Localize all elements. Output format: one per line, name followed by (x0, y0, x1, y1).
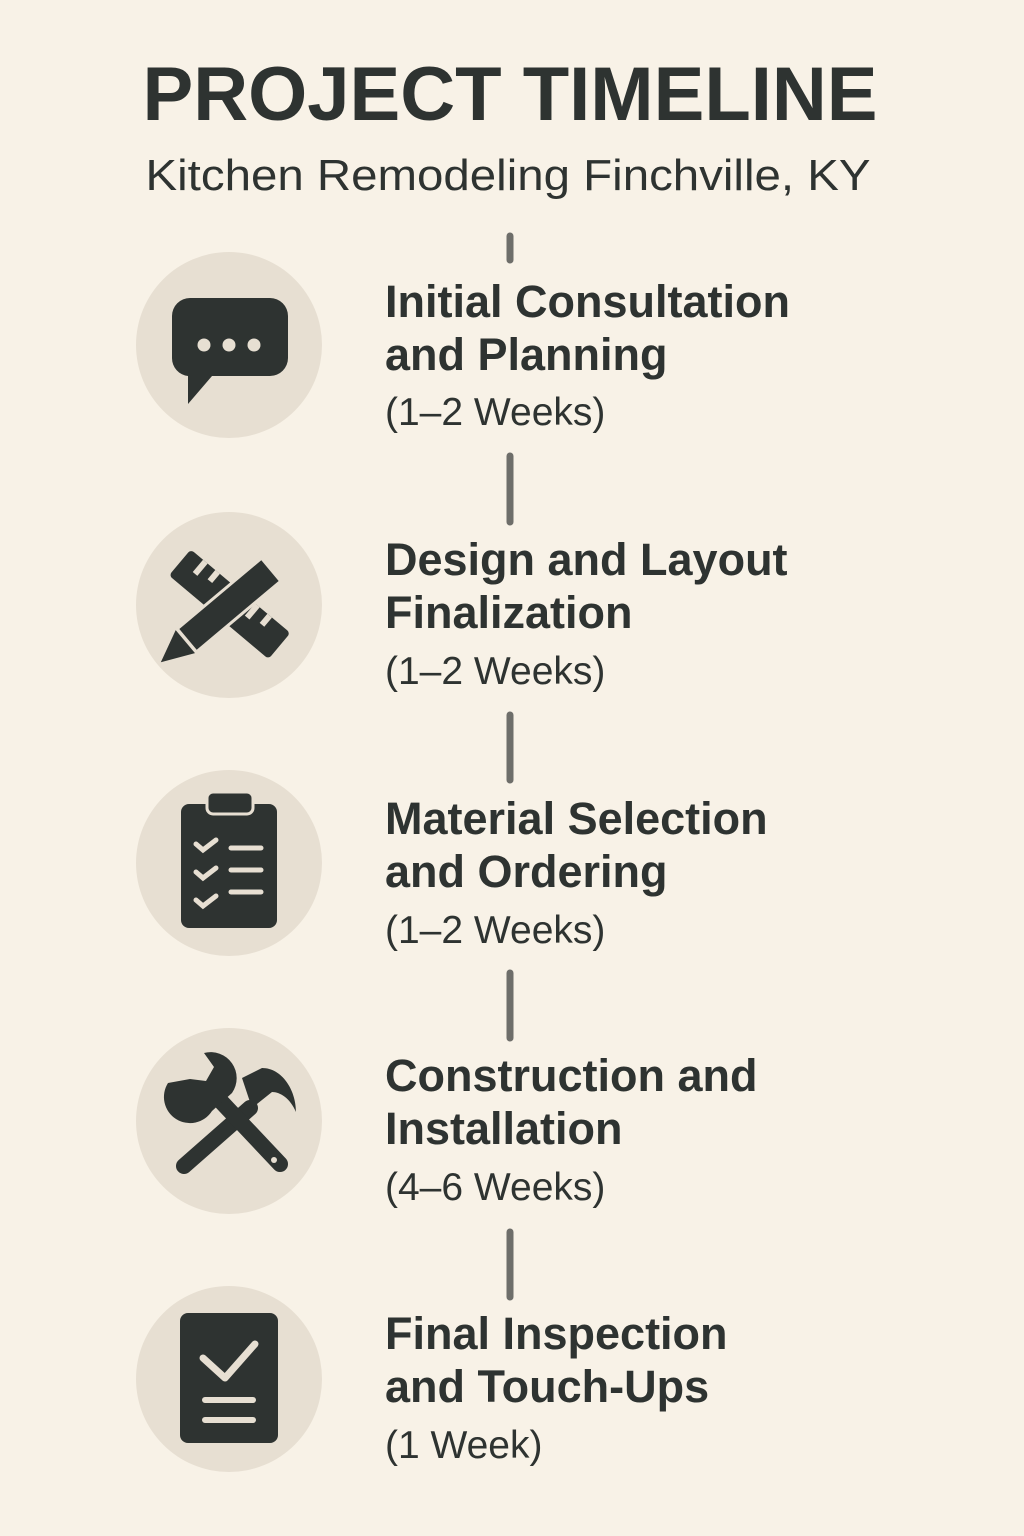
text: step 1: Initial Consultation (385, 276, 790, 327)
text: step 5: Final Inspection (385, 1308, 728, 1359)
icon: checked document (136, 1286, 322, 1472)
text: step 3: (1–2 Weeks) (385, 909, 605, 952)
text: step 1: (1–2 Weeks) (385, 391, 605, 434)
text: step 3 (385, 793, 768, 952)
step 4: construction (136, 1028, 757, 1214)
step 5: inspection (136, 1286, 728, 1472)
text: step 2: Finalization (385, 587, 632, 638)
text: step 2: Design and Layout (385, 534, 788, 585)
text: step 2 (385, 534, 788, 693)
step 2: design (136, 512, 788, 698)
text: step 4: Installation (385, 1103, 623, 1154)
icon: chat bubble (136, 252, 322, 438)
icon: wrench and hammer (136, 1028, 322, 1214)
text: step 3: Material Selection (385, 793, 768, 844)
text: step 4 (385, 1050, 757, 1209)
text: step 5 (385, 1308, 728, 1467)
step 3: materials (136, 770, 768, 956)
text: step 4: Construction and (385, 1050, 757, 1101)
icon: pencil and ruler (136, 512, 322, 698)
text: step 2: (1–2 Weeks) (385, 650, 605, 693)
title: PROJECT TIMELINE (142, 52, 878, 137)
text: step 5: (1 Week) (385, 1424, 542, 1467)
subtitle: Kitchen Remodeling Finchville, KY (146, 151, 870, 200)
text: step 3: and Ordering (385, 846, 668, 897)
text: step 4: (4–6 Weeks) (385, 1166, 605, 1209)
text: step 5: and Touch-Ups (385, 1361, 709, 1412)
text: step 1 (385, 276, 790, 434)
text: step 1: and Planning (385, 329, 668, 380)
timeline connectors (506, 236, 514, 1297)
step 1: consultation (136, 252, 790, 438)
icon: clipboard checklist (136, 770, 322, 956)
